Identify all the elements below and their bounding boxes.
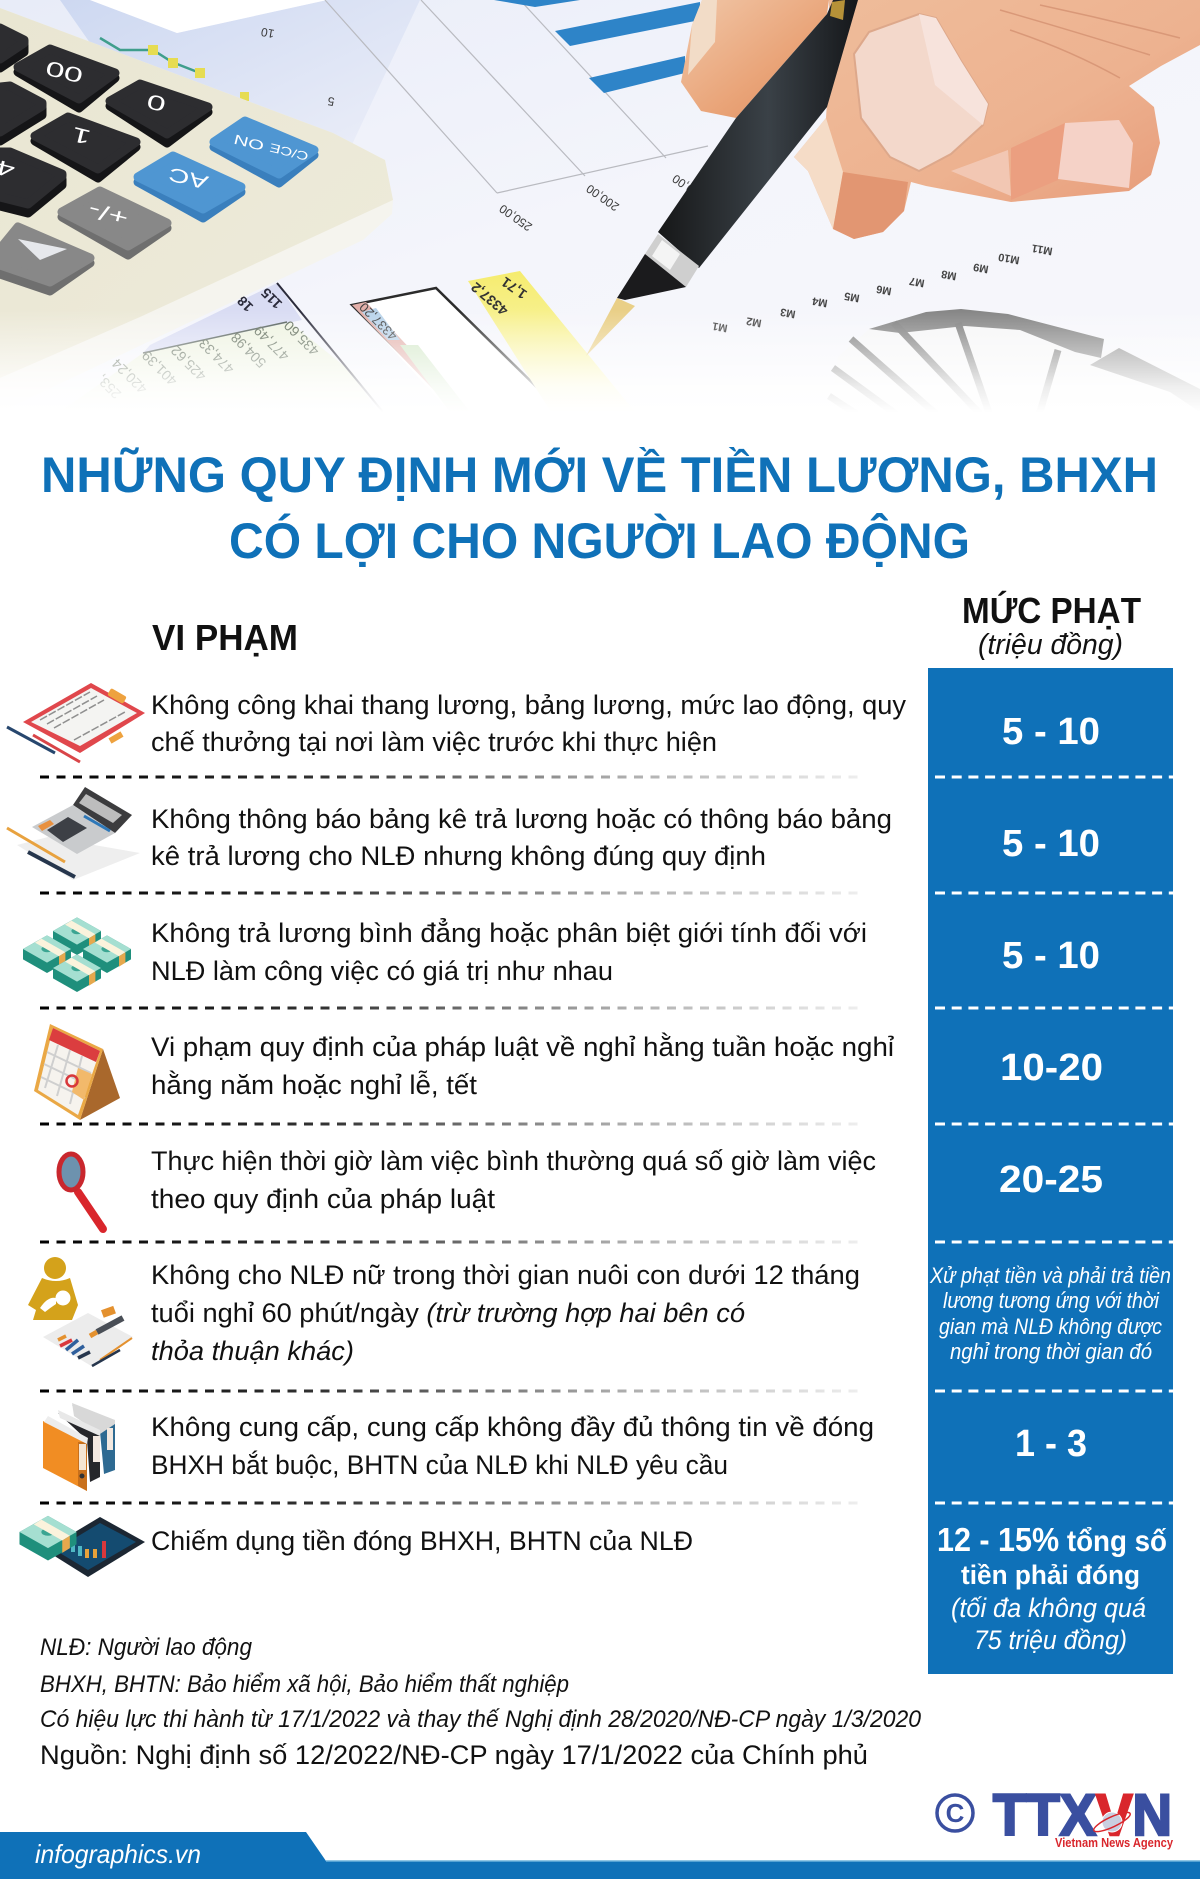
hero photo: calculator, pen and charts: M5 [843, 289, 861, 304]
violation texts: Không thông báo bảng kê trả lương hoặc có thông báo bảng [151, 804, 892, 834]
icon: calendar [34, 1024, 120, 1120]
calculator [0, 8, 393, 412]
hero photo: calculator, pen and charts: 1,71 [498, 274, 530, 303]
fine values: lương tương ứng với thời [943, 1288, 1160, 1313]
hero photo: calculator, pen and charts: M8 [940, 267, 958, 282]
violation texts [151, 690, 906, 1556]
spreadsheet: 401,39 [138, 347, 180, 389]
hero photo: calculator, pen and charts: M1 [711, 319, 729, 334]
spreadsheet: 115 [258, 285, 285, 312]
fine dividers [935, 777, 1173, 1503]
fine values: 5 - 10 [1002, 935, 1100, 977]
fine values: (tối đa không quá [951, 1593, 1146, 1623]
fine values [929, 711, 1171, 1655]
violation texts: Vi phạm quy định của pháp luật về nghỉ hằng tuần hoặc nghỉ [151, 1031, 894, 1062]
fine values: 1 - 3 [1015, 1423, 1087, 1465]
icon: magnifier [59, 1154, 103, 1229]
violation texts: BHXH bắt buộc, BHTN của NLĐ khi NLĐ yêu cầu [151, 1449, 728, 1480]
spreadsheet: 474,33 [195, 335, 237, 377]
fine values: 10-20 [1000, 1047, 1103, 1089]
footer band: infographics.vn [35, 1839, 201, 1869]
icon: mother and documents [28, 1257, 133, 1367]
title [41, 446, 1158, 569]
footnotes: BHXH, BHTN: Bảo hiểm xã hội, Bảo hiểm thất nghiệp [40, 1671, 569, 1698]
spreadsheet: 253, [94, 372, 124, 402]
fine values: nghỉ trong thời gian đó [950, 1339, 1152, 1364]
hero photo: calculator, pen and charts [0, 0, 1200, 436]
footnotes: NLĐ: Người lao động [40, 1634, 253, 1661]
hero photo: calculator, pen and charts: 10 [260, 25, 276, 41]
hero photo: calculator, pen and charts: M10 [997, 250, 1021, 266]
icon: calculator and papers [7, 787, 140, 880]
spreadsheet [100, 282, 378, 405]
hand holding pen [586, 0, 1200, 356]
title: NHỮNG QUY ĐỊNH MỚI VỀ TIỀN LƯƠNG, BHXH [41, 446, 1158, 503]
logo: TTXVN: Vietnam News Agency [1055, 1835, 1174, 1850]
hero photo: calculator, pen and charts: 250,00 [496, 201, 535, 234]
hero photo: calculator, pen and charts: 5 [326, 94, 336, 109]
hero photo: calculator, pen and charts: 150,00 [669, 171, 708, 204]
calculator: 0 [144, 89, 168, 116]
spreadsheet: 504,98 [227, 329, 269, 371]
fine values: gian mà NLĐ không được [939, 1314, 1162, 1339]
spreadsheet: 18 [234, 293, 256, 315]
fine values: 5 - 10 [1002, 711, 1100, 753]
fine values: 75 triệu đồng) [974, 1625, 1127, 1655]
violation texts: hằng năm hoặc nghỉ lễ, tết [151, 1069, 478, 1100]
violation texts: Không cung cấp, cung cấp không đầy đủ thông tin về đóng [151, 1412, 874, 1442]
logo: TTXVN: TTXVN [993, 1783, 1172, 1848]
fine values: Xử phạt tiền và phải trả tiền [929, 1263, 1171, 1288]
heading: mức phạt: MỨC PHẠT [962, 589, 1141, 631]
fine values: tiền phải đóng [961, 1560, 1140, 1590]
icon: binders [43, 1403, 115, 1491]
violation texts: tuổi nghỉ 60 phút/ngày (trừ trường hợp hai bên có [151, 1298, 745, 1328]
icon: money bundles [23, 917, 131, 992]
fine values: 12 - 15% tổng số [937, 1521, 1167, 1558]
violation texts: theo quy định của pháp luật [151, 1184, 496, 1214]
panel: fines column [928, 668, 1173, 1674]
footnotes: Có hiệu lực thi hành từ 17/1/2022 và thay thế Nghị định 28/2020/NĐ-CP ngày 1/3/2020 [40, 1706, 922, 1733]
hero photo: calculator, pen and charts: M4 [811, 294, 829, 309]
calculator: C/CE [268, 140, 310, 162]
hero photo: calculator, pen and charts: M11 [1031, 241, 1054, 257]
hero photo: calculator, pen and charts: 4337,2 [468, 279, 511, 319]
heading: mức phạt: (triệu đồng) [978, 629, 1123, 661]
hero photo: calculator, pen and charts: M2 [745, 314, 763, 329]
violation texts: thỏa thuận khác) [151, 1336, 354, 1366]
hero photo: calculator, pen and charts: M6 [875, 282, 893, 297]
row dividers [40, 777, 860, 1503]
footer band [0, 1832, 1200, 1879]
violation texts: Không công khai thang lương, bảng lương, mức lao động, quy [151, 690, 906, 720]
hero photo: calculator, pen and charts: 4337,20 [356, 300, 400, 343]
calculator: 1 [69, 122, 93, 149]
violation texts: kê trả lương cho NLĐ nhưng không đúng quy định [151, 841, 766, 871]
violation texts: Chiếm dụng tiền đóng BHXH, BHTN của NLĐ [151, 1526, 693, 1556]
hero photo: calculator, pen and charts: M3 [779, 305, 797, 320]
title: CÓ LỢI CHO NGƯỜI LAO ĐỘNG [229, 512, 970, 569]
footnotes: Nguồn: Nghị định số 12/2022/NĐ-CP ngày 17/1/2022 của Chính phủ [40, 1740, 868, 1770]
calculator: +/- [86, 198, 131, 230]
spreadsheet: 477,49 [250, 322, 292, 364]
hero photo: calculator, pen and charts: M9 [972, 260, 990, 275]
icon: tablet and money [19, 1516, 145, 1577]
heading: vi phạm: VI PHẠM [152, 617, 298, 658]
logo: TTXVN: C [946, 1798, 965, 1828]
heading: mức phạt [962, 589, 1141, 661]
calculator: ON [232, 131, 266, 154]
violation texts: Thực hiện thời giờ làm việc bình thường quá số giờ làm việc [151, 1146, 876, 1176]
spreadsheet: 425,62 [167, 342, 209, 384]
calculator: 00 [43, 56, 85, 88]
footnotes [40, 1634, 922, 1770]
hero photo: calculator, pen and charts: M7 [908, 274, 926, 289]
violation texts: Không trả lương bình đẳng hoặc phân biệt giới tính đối với [151, 916, 867, 948]
pie chart [828, 309, 1200, 401]
fine values: 20-25 [999, 1159, 1103, 1201]
hero photo: calculator, pen and charts: 200,00 [583, 181, 622, 214]
fine values: 5 - 10 [1002, 823, 1100, 865]
violation texts: NLĐ làm công việc có giá trị như nhau [151, 956, 613, 986]
spreadsheet: 435,60 [280, 317, 322, 359]
icon: clipboard [7, 683, 145, 762]
violation texts: Không cho NLĐ nữ trong thời gian nuôi con dưới 12 tháng [151, 1260, 860, 1290]
calculator: AC [167, 163, 211, 193]
violation texts: chế thưởng tại nơi làm việc trước khi thực hiện [151, 727, 717, 757]
spreadsheet: 420,24 [108, 355, 150, 397]
